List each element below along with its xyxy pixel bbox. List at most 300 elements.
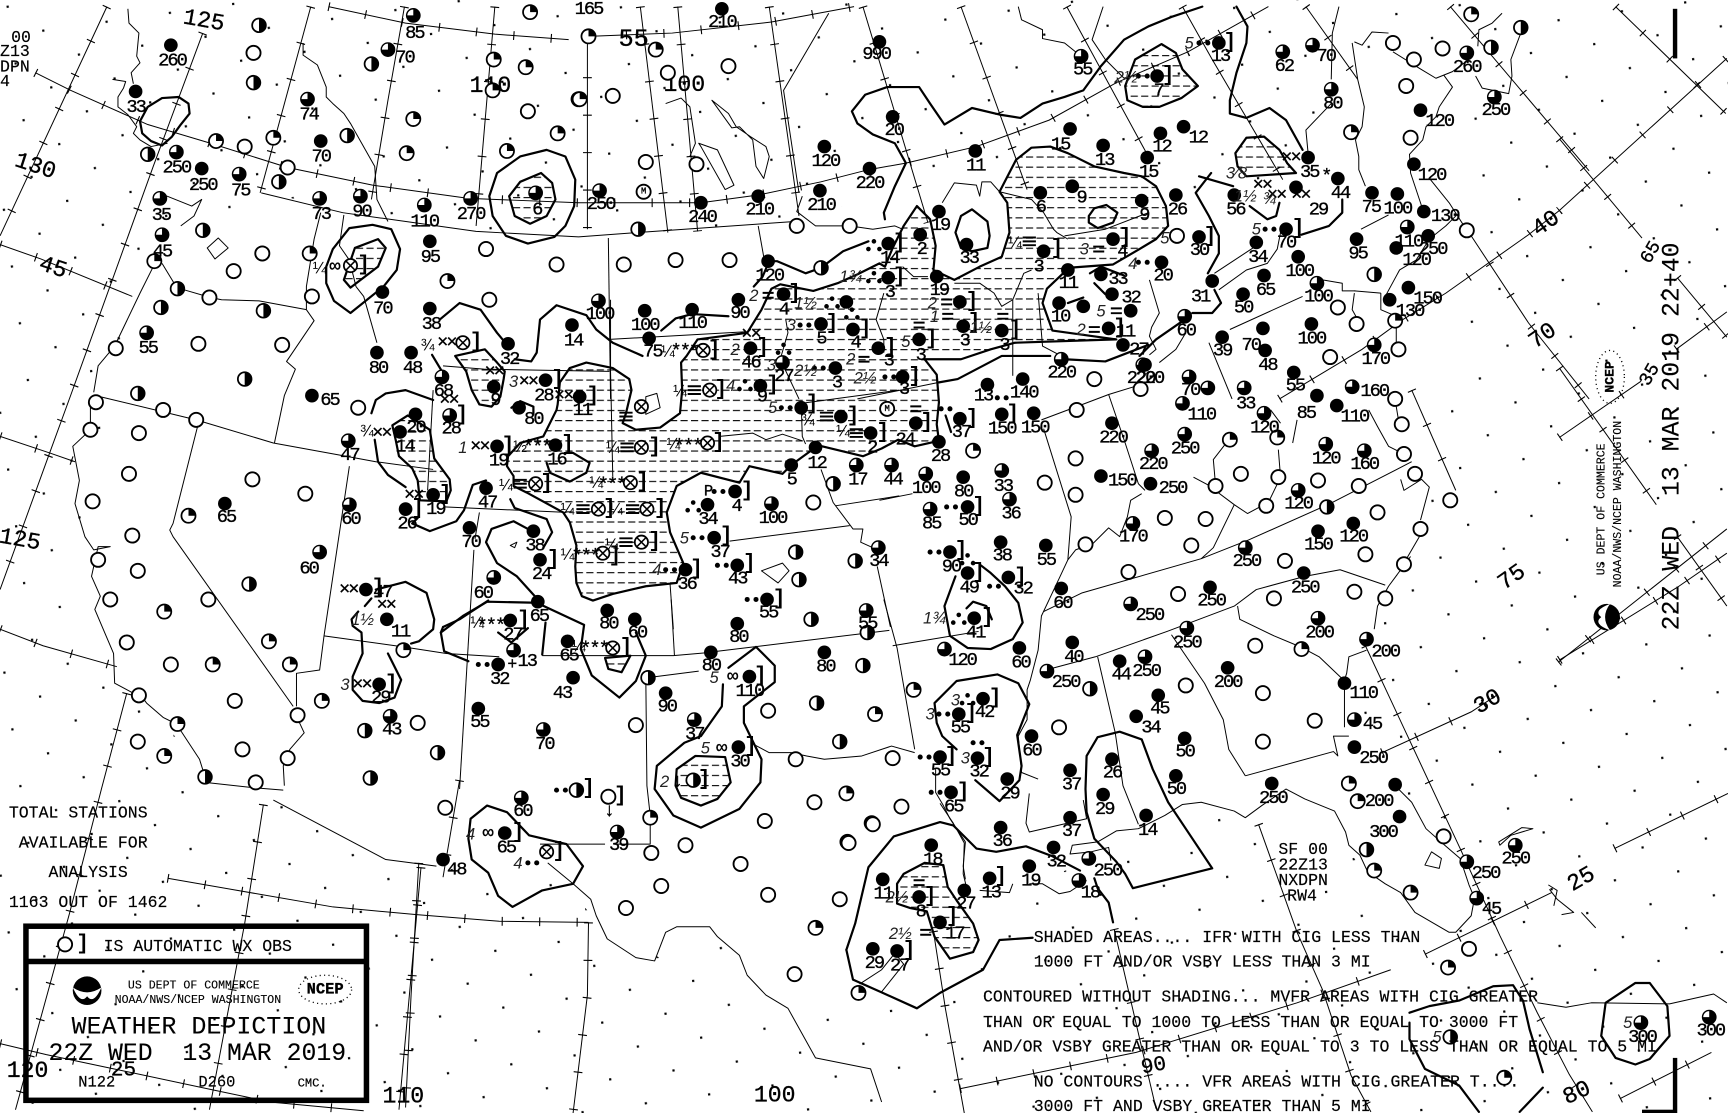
page corner marks — [1642, 9, 1677, 1113]
visibility values: 3⁄8 — [1226, 164, 1248, 183]
sky-condition brackets and weather glyphs: ] — [965, 703, 977, 726]
station value labels: 28 — [534, 385, 553, 407]
visibility values: ¼ — [589, 473, 603, 492]
sky-condition brackets and weather glyphs: ] — [1051, 238, 1063, 261]
visibility values: 3 — [767, 355, 777, 374]
agency lines: NOAA/NWS/NCEP WASHINGTON — [115, 994, 281, 1007]
sky-condition brackets and weather glyphs: ] — [385, 673, 398, 696]
visibility values: ¾ — [1263, 189, 1277, 208]
agency lines: US DEPT OF COMMERCE — [128, 979, 260, 992]
station value labels: 9 — [1076, 186, 1086, 208]
station value labels: 250 — [1159, 477, 1188, 499]
legend: automatic observation: ] — [76, 933, 89, 956]
visibility values: ¼ — [561, 500, 575, 519]
sky-condition brackets and weather glyphs: ] — [603, 498, 616, 521]
station value labels: 19 — [489, 450, 508, 472]
station value labels: 43 — [728, 568, 748, 590]
station value labels: 80 — [954, 480, 974, 502]
station value labels: 15 — [1139, 161, 1159, 183]
station value labels: 26 — [397, 512, 418, 534]
station value labels: 120 — [1402, 249, 1432, 271]
sky-condition brackets and weather glyphs: ] — [945, 746, 957, 769]
station value labels: 32 — [490, 668, 509, 690]
sky-condition brackets and weather glyphs: ↓ — [604, 800, 613, 822]
station value labels: 100 — [759, 507, 788, 529]
station value labels: 30 — [1190, 239, 1210, 261]
visibility values: ¾ — [360, 421, 374, 440]
sky-condition brackets and weather glyphs: ×× — [437, 332, 456, 354]
text: run identifier left: DPN — [0, 58, 30, 77]
station value labels: 19 — [931, 214, 950, 236]
visibility values: 5 — [1623, 1013, 1633, 1032]
station value labels: 55 — [759, 602, 779, 624]
icon: NCEP logo — [299, 975, 352, 1004]
sky-condition brackets and weather glyphs: *** — [523, 436, 551, 458]
station value labels: 12 — [1189, 127, 1208, 149]
station value labels: 150 — [1021, 417, 1050, 439]
text: total stations: ANALYSIS — [49, 863, 128, 882]
station value labels: 45 — [1150, 698, 1170, 720]
station value labels: 11 — [873, 883, 894, 905]
visibility values: 5 — [710, 668, 720, 687]
station value labels: 20 — [885, 119, 905, 141]
sky-condition brackets and weather glyphs: ] — [1292, 218, 1304, 241]
station value labels: 250 — [1132, 660, 1162, 682]
station value labels: 160 — [1350, 453, 1380, 475]
station value labels: 35 — [1300, 161, 1320, 183]
station value labels: 140 — [1010, 381, 1039, 403]
station value labels: 36 — [992, 830, 1013, 852]
sky-condition brackets and weather glyphs: ×× — [470, 435, 489, 457]
station value labels: 250 — [1259, 787, 1288, 809]
sky-condition brackets and weather glyphs: ] — [893, 266, 906, 289]
station value labels: 38 — [422, 313, 441, 335]
visibility values: 1 — [458, 438, 467, 457]
visibility values: 3 — [340, 675, 350, 694]
text: chart legend notes: CONTOURED WITHOUT SHADING... MVFR AREAS WITH CIG GREATER — [983, 988, 1538, 1007]
text: run identifier centre: NXDPN — [1278, 871, 1328, 890]
station value labels: 47 — [373, 581, 392, 603]
sky-condition brackets and weather glyphs: *** — [671, 341, 698, 363]
station value labels: 36 — [1001, 503, 1022, 525]
station value labels: 250 — [1136, 604, 1165, 626]
station value labels: 47 — [340, 444, 359, 466]
station value labels: 60 — [341, 508, 361, 530]
station value labels: 100 — [1383, 197, 1413, 219]
station value labels: 5 — [816, 327, 827, 349]
sky-condition brackets and weather glyphs: ] — [743, 553, 756, 576]
visibility values: 5 — [1096, 301, 1106, 320]
grid coordinate labels: 70 — [1524, 317, 1562, 355]
visibility values: ¼ — [666, 435, 680, 454]
visibility values: ¼ — [605, 535, 619, 554]
chart codes: CMC. — [298, 1077, 327, 1091]
station value labels: 37 — [1062, 820, 1081, 842]
sky-condition brackets and weather glyphs: ] — [517, 609, 530, 632]
sky-condition brackets and weather glyphs: ] — [455, 404, 468, 427]
station value labels: 18 — [1081, 882, 1100, 904]
station value labels: 95 — [421, 246, 441, 268]
station value labels: 13 — [1211, 45, 1231, 67]
visibility values: 1¾ — [839, 267, 862, 286]
agency lines — [115, 979, 281, 1007]
station value labels: 6 — [532, 198, 543, 220]
station value labels: 210 — [807, 194, 837, 216]
sky-condition brackets and weather glyphs: ] — [587, 385, 599, 408]
station value labels: 60 — [1011, 651, 1031, 673]
grid coordinate labels: 90 — [1139, 1053, 1168, 1080]
sky-condition brackets and weather glyphs: ×× — [404, 484, 423, 506]
station value labels: 70 — [1181, 379, 1201, 401]
station value labels: 55 — [951, 716, 971, 738]
grid coordinate labels: 110 — [383, 1083, 424, 1109]
station value labels: 17 — [848, 468, 867, 490]
sky-condition brackets and weather glyphs: ] — [648, 436, 661, 459]
station value labels: 250 — [1472, 862, 1501, 884]
station value labels: 60 — [1177, 320, 1197, 342]
sky-condition brackets and weather glyphs: ↓ — [672, 770, 681, 792]
sky-condition brackets and weather glyphs: ] — [955, 539, 967, 562]
sky-condition brackets and weather glyphs: ] — [876, 422, 889, 445]
station value labels: 80 — [702, 655, 722, 677]
sky-condition brackets and weather glyphs: ×× — [1253, 174, 1272, 196]
sky-condition brackets and weather glyphs: ] — [357, 254, 370, 277]
station value labels: 68 — [434, 380, 453, 402]
station value labels: 32 — [969, 760, 989, 782]
sky-condition brackets and weather glyphs: ] — [982, 747, 995, 770]
station value labels: 9 — [490, 389, 500, 411]
station value labels: 32 — [1013, 577, 1033, 599]
station value labels: 50 — [1167, 778, 1187, 800]
station value labels: 3 — [960, 330, 971, 352]
sky-condition brackets and weather glyphs: ] — [614, 785, 627, 808]
station value labels: 80 — [524, 408, 544, 430]
station value labels: 39 — [609, 834, 628, 856]
station value labels: 45 — [1482, 898, 1502, 920]
station value labels: 260 — [1453, 56, 1482, 78]
sky-condition brackets and weather glyphs: ] — [957, 781, 969, 804]
station value labels: 65 — [559, 645, 580, 667]
station value labels: 47 — [478, 492, 497, 514]
station value labels: 90 — [942, 555, 962, 577]
sky-condition brackets and weather glyphs: ] — [1009, 319, 1021, 342]
station value labels: 120 — [1418, 164, 1447, 186]
station value labels: 270 — [457, 203, 486, 225]
station value labels: 110 — [410, 210, 440, 232]
sky-condition brackets and weather glyphs: ×× — [352, 673, 371, 695]
station value labels: 19 — [426, 498, 445, 520]
visibility values: 2 — [748, 286, 758, 305]
station value labels: 13 — [974, 385, 994, 407]
station value labels: 55 — [1073, 58, 1093, 80]
sky-condition brackets and weather glyphs: ] — [744, 736, 757, 759]
text: total stations — [9, 804, 167, 912]
station value labels: 46 — [741, 352, 761, 374]
station value labels: 55 — [470, 711, 490, 733]
station value labels: 12 — [807, 452, 827, 474]
visibility values: 5 — [901, 332, 911, 351]
station value labels: 33 — [126, 96, 147, 118]
sky-condition brackets and weather glyphs: ] — [966, 407, 978, 430]
station value labels: 90 — [730, 302, 750, 324]
station value labels: 48 — [1258, 354, 1277, 376]
station value labels: 70 — [311, 145, 332, 167]
station value labels: 75 — [643, 341, 663, 363]
station value labels: 4 — [732, 495, 743, 517]
station value labels: 10 — [1051, 305, 1071, 327]
visibility values: 2½ — [888, 924, 912, 943]
sky-condition brackets and weather glyphs: ×× — [439, 389, 459, 411]
visibility values: ¼ — [561, 545, 575, 564]
station value labels: 55 — [858, 613, 878, 635]
station value labels: 210 — [708, 11, 737, 33]
sky-condition brackets and weather glyphs: *** — [674, 435, 702, 457]
sky-condition brackets and weather glyphs: ] — [994, 866, 1007, 889]
text: run identifier centre: SF 00 — [1278, 840, 1328, 859]
station value labels: 70 — [1277, 231, 1297, 253]
station value labels: 34 — [869, 550, 889, 572]
sky-condition brackets and weather glyphs: ] — [826, 312, 838, 335]
visibility values: ¼ — [470, 613, 484, 632]
station value labels: 90 — [352, 201, 372, 223]
station value labels: 110 — [678, 312, 708, 334]
station value labels: 33 — [959, 247, 980, 269]
station value labels: 34 — [1248, 246, 1268, 268]
station value labels: 220 — [1136, 367, 1165, 389]
station value labels: 250 — [1197, 590, 1227, 612]
station value labels: 75 — [231, 180, 251, 202]
station value labels: 4 — [1117, 240, 1128, 262]
station value labels: 100 — [586, 303, 615, 325]
station value labels: 150 — [988, 418, 1017, 440]
station value labels: 33 — [1108, 268, 1128, 290]
station value labels: 250 — [1419, 238, 1448, 260]
station value labels: 37 — [952, 421, 971, 443]
visibility values: ¼ — [609, 500, 623, 519]
station value labels: 26 — [1168, 198, 1188, 220]
station value labels: 26 — [1103, 761, 1123, 783]
grid coordinate labels: 40 — [1527, 205, 1565, 242]
station value labels: 300 — [1628, 1026, 1658, 1048]
sky-condition brackets and weather glyphs: ] — [372, 577, 384, 600]
station value labels: 65 — [320, 389, 341, 411]
station value labels: 100 — [1298, 327, 1327, 349]
station value labels: 250 — [587, 193, 616, 215]
rotated agency lines: NOAA/NWS/NCEP WASHINGTON — [1612, 421, 1625, 587]
sky-condition brackets and weather glyphs: ×× — [554, 385, 573, 407]
station value labels: 300 — [1369, 821, 1399, 843]
station value labels: 39 — [1213, 339, 1232, 361]
text: run identifier centre: 22Z13 — [1278, 855, 1328, 874]
station value labels: 250 — [1173, 631, 1203, 653]
sky-condition brackets and weather glyphs: ] — [502, 435, 514, 458]
shaded IFR areas — [344, 44, 1296, 959]
visibility values: 3 — [787, 316, 797, 335]
station value labels: 14 — [395, 435, 415, 457]
station value labels: 250 — [1482, 99, 1511, 121]
station value labels: 49 — [959, 576, 979, 598]
sky-condition brackets and weather glyphs: ] — [654, 498, 666, 521]
station value labels: 38 — [992, 544, 1012, 566]
visibility values: 2½ — [885, 888, 909, 907]
grid coordinate labels: 120 — [7, 1058, 48, 1084]
rotated NCEP logo — [1596, 350, 1624, 403]
station value labels: 50 — [958, 509, 979, 531]
station value labels: 41 — [966, 622, 986, 644]
station value labels: 100 — [1304, 285, 1334, 307]
station value labels: 28 — [442, 418, 461, 440]
station value labels: 200 — [1305, 622, 1335, 644]
sky-condition brackets and weather glyphs: ×× — [372, 422, 391, 444]
rotated NCEP logo: NCEP — [1603, 361, 1618, 393]
sky-condition brackets and weather glyphs: *** — [598, 474, 626, 496]
station value labels: 7 — [1154, 79, 1164, 101]
station value labels: 33 — [994, 475, 1014, 497]
station value labels: 32 — [500, 348, 519, 370]
sky-condition brackets and weather glyphs: ] — [547, 548, 560, 571]
sky-condition brackets and weather glyphs: ] — [582, 778, 595, 801]
sky-condition brackets and weather glyphs: M — [885, 404, 890, 414]
rotated agency lines — [1596, 421, 1625, 587]
station value labels: 170 — [1361, 348, 1391, 370]
visibility values: 4 — [513, 853, 523, 872]
sky-condition brackets and weather glyphs: ] — [512, 822, 524, 845]
sky-condition brackets and weather glyphs: ] — [620, 636, 632, 659]
station value labels: 120 — [1250, 417, 1280, 439]
station value labels: 60 — [1053, 592, 1073, 614]
text: run identifier centre — [1278, 840, 1328, 905]
station value labels: 120 — [1425, 110, 1455, 132]
visibility values: 5 — [1252, 220, 1262, 239]
station value labels: 70 — [373, 298, 393, 320]
sky-condition brackets and weather glyphs: ] — [884, 337, 897, 360]
sky-condition brackets and weather glyphs: + — [507, 655, 516, 674]
station value labels: 20 — [1153, 264, 1174, 286]
station value labels: 250 — [1233, 550, 1262, 572]
station value labels: 80 — [369, 357, 389, 379]
sky-condition brackets and weather glyphs: ] — [981, 607, 994, 630]
sky-condition brackets and weather glyphs: ] — [859, 318, 871, 341]
sky-condition brackets and weather glyphs: P — [704, 482, 713, 500]
sky-condition brackets and weather glyphs: ] — [470, 331, 482, 354]
visibility values: ½ — [513, 437, 527, 456]
visibility values: 5 — [1160, 229, 1170, 248]
station value labels: 130 — [1396, 300, 1425, 322]
sky-condition brackets and weather glyphs: ] — [411, 498, 424, 521]
station value labels: 50 — [1234, 296, 1254, 318]
grid coordinate labels: 100 — [754, 1082, 796, 1108]
sky-condition brackets and weather glyphs: ] — [648, 531, 661, 554]
text: chart legend notes: SHADED AREAS.... IFR WITH CIG LESS THAN — [1034, 928, 1420, 947]
station value labels: 40 — [1064, 646, 1084, 668]
station value labels: 50 — [1175, 741, 1196, 763]
station value labels: 13 — [518, 650, 538, 672]
station value labels: 15 — [1051, 133, 1071, 155]
text: chart legend notes: 1000 FT AND/OR VSBY LESS THAN 3 MI — [1034, 952, 1371, 971]
station value labels: 14 — [564, 330, 584, 352]
station value labels: 85 — [405, 22, 425, 44]
station value labels: 24 — [896, 429, 916, 451]
text: total stations: 1163 OUT OF 1462 — [9, 893, 167, 912]
sky-condition brackets and weather glyphs: ] — [720, 525, 733, 548]
station value labels: 120 — [1312, 447, 1341, 469]
station value labels: 11 — [1059, 272, 1079, 294]
station value labels: 18 — [923, 849, 942, 871]
station value labels: 130 — [1431, 205, 1460, 227]
visibility values: 2½ — [1114, 68, 1138, 87]
visibility values: 1 — [930, 307, 939, 326]
station value labels: 32 — [1121, 287, 1141, 309]
station value labels: 3 — [1033, 256, 1044, 278]
station value labels: 220 — [856, 172, 885, 194]
station value labels: 70 — [1242, 334, 1262, 356]
station value labels: 6 — [1036, 196, 1047, 218]
legend: automatic observation — [58, 933, 292, 956]
sky-condition brackets and weather glyphs: M — [641, 187, 646, 197]
visibility values: ¼ — [1008, 233, 1022, 252]
station value labels: 55 — [138, 337, 159, 359]
station value labels: 12 — [1152, 136, 1172, 158]
visibility values: 3 — [951, 690, 961, 709]
station value labels: 3 — [885, 281, 896, 303]
sky-condition brackets and weather glyphs: ∞ — [727, 666, 738, 688]
visibility values: 1½ — [1234, 187, 1257, 206]
sky-condition brackets and weather glyphs: ] — [1014, 566, 1027, 589]
sky-condition brackets and weather glyphs: *** — [580, 638, 608, 660]
station value labels: 80 — [816, 656, 836, 678]
station value labels: 70 — [461, 531, 482, 553]
station value labels: 3 — [832, 371, 843, 393]
chart codes: D260 — [198, 1074, 235, 1092]
sky-condition brackets and weather glyphs: ] — [847, 405, 859, 428]
station value labels: 120 — [755, 264, 785, 286]
grid coordinate labels: 30 — [1469, 684, 1506, 720]
title block — [25, 926, 367, 1100]
station value labels: 110 — [1395, 230, 1424, 252]
station value labels: 60 — [628, 622, 648, 644]
grid coordinate labels: 25 — [1563, 861, 1600, 898]
station value labels: 5 — [787, 468, 798, 490]
sky-condition brackets and weather glyphs: ] — [806, 393, 818, 416]
sky-condition brackets and weather glyphs: ] — [908, 365, 921, 388]
station value labels: 55 — [931, 759, 951, 781]
sky-condition brackets and weather glyphs: ] — [989, 687, 1001, 710]
station value labels: 73 — [311, 203, 332, 225]
grid coordinate labels: 130 — [11, 148, 59, 185]
text: run identifier left — [0, 28, 31, 91]
station value labels: 29 — [1000, 782, 1019, 804]
station value labels: 48 — [447, 858, 466, 880]
icon: NOAA logo — [73, 976, 101, 1005]
sky-condition brackets and weather glyphs: ] — [756, 337, 769, 360]
sky-condition brackets and weather glyphs: ] — [690, 558, 703, 581]
visibility values: ¼ — [836, 421, 850, 440]
station value labels: 65 — [497, 836, 517, 858]
station value labels: 3 — [899, 378, 910, 400]
text: total stations: TOTAL STATIONS — [9, 804, 148, 823]
sky-condition brackets and weather glyphs: ] — [766, 374, 779, 397]
station value labels: 260 — [158, 50, 188, 72]
station value labels: 220 — [1099, 426, 1129, 448]
sky-condition brackets and weather glyphs: ] — [708, 339, 720, 362]
sky-condition brackets and weather glyphs: ] — [714, 379, 727, 402]
sky-condition brackets and weather glyphs: ] — [925, 328, 938, 351]
sky-condition brackets and weather glyphs: *** — [477, 615, 504, 637]
station value labels: 16 — [547, 449, 568, 471]
grid coordinate labels: 25 — [111, 1060, 136, 1083]
grid coordinate labels: 80 — [1559, 1076, 1595, 1111]
sky-condition brackets and weather glyphs: ] — [1224, 31, 1236, 54]
